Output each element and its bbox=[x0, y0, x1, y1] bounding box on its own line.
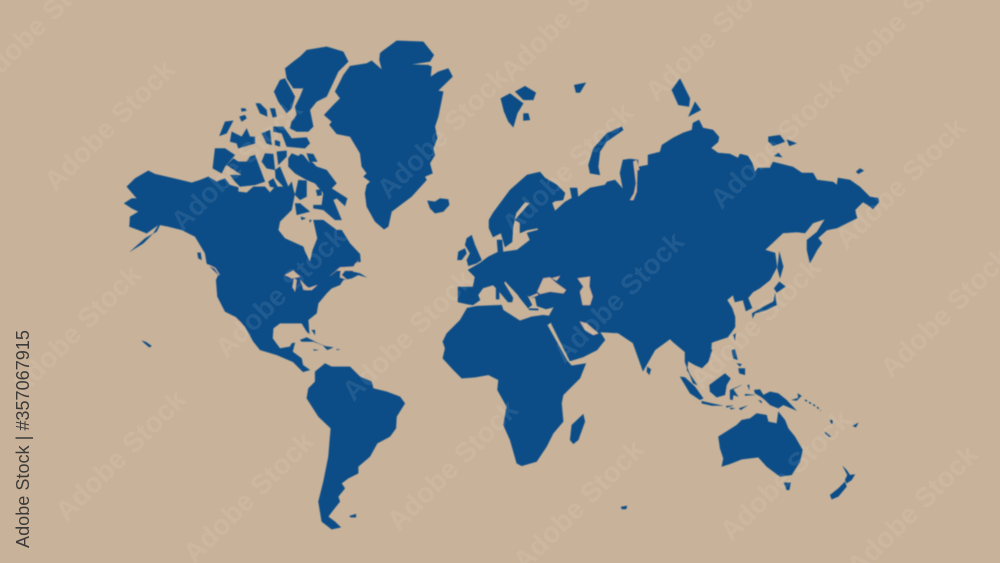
watermarks: Adobe Stock bbox=[684, 252, 827, 395]
stock id label: Adobe Stock | #357067915 bbox=[13, 330, 33, 548]
watermarks: Adobe Stock bbox=[336, 264, 479, 407]
landmasses bbox=[124, 41, 879, 529]
continent: Australia bbox=[718, 412, 803, 490]
continent: Africa bbox=[443, 305, 586, 466]
continent: South America bbox=[307, 363, 405, 529]
island: Greenland bbox=[324, 41, 453, 229]
islands: Europe bbox=[457, 235, 538, 310]
watermarks: Adobe Stock bbox=[165, 94, 308, 237]
watermarks: Adobe Stock bbox=[829, 112, 972, 255]
watermarks: Adobe Stock bbox=[4, 259, 147, 402]
Arctic archipelago bbox=[213, 47, 348, 223]
island: remote southern bbox=[621, 506, 627, 509]
watermarks: Adobe Stock bbox=[38, 54, 181, 197]
watermarks: Adobe Stock bbox=[381, 394, 524, 537]
watermarks: Adobe Stock bbox=[371, 62, 514, 205]
watermarks: Adobe Stock bbox=[49, 384, 192, 527]
island: Hawaii bbox=[142, 341, 152, 347]
islands: Caribbean bbox=[300, 330, 340, 351]
watermarks: Adobe Stock bbox=[209, 221, 352, 364]
islands: Siberian and Pacific bbox=[647, 78, 864, 375]
watermarks: Adobe Stock bbox=[704, 72, 847, 215]
islands: New Zealand bbox=[830, 466, 855, 499]
continent: Eurasia bbox=[458, 120, 879, 385]
islands: Southeast Asia and Oceania bbox=[680, 349, 858, 437]
island: Vancouver bbox=[197, 253, 202, 260]
inland seas bbox=[530, 160, 639, 335]
continent: North America bbox=[124, 47, 367, 372]
islands: Arctic Eurasia bbox=[501, 83, 623, 175]
watermarks: Adobe Stock bbox=[547, 226, 690, 369]
watermarks: Adobe Stock bbox=[496, 97, 639, 240]
island: Iceland bbox=[427, 198, 449, 213]
watermarks: Adobe Stock bbox=[714, 404, 857, 547]
great lakes bbox=[208, 261, 358, 338]
